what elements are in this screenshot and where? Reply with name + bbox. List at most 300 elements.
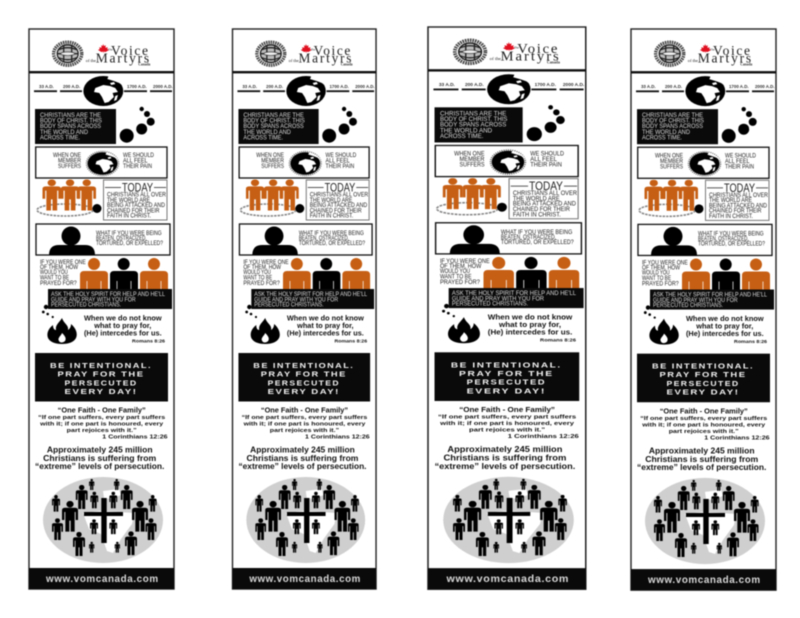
- three people: [682, 258, 770, 292]
- panel: today: CHAINED FOR THEIR: [310, 207, 362, 214]
- panel: today: FAITH IN CHRIST.: [310, 212, 353, 220]
- card frame: [631, 29, 776, 590]
- black text panel: ACROSS TIME.: [40, 134, 80, 142]
- timeline: 2000 A.D.: [153, 84, 173, 89]
- panel: when one member suffers: [638, 147, 769, 178]
- timeline: 200 A.D.: [465, 82, 484, 87]
- text: one faith one family: “If one part suffers, every part suffers: [38, 415, 165, 421]
- small dots: [442, 304, 455, 317]
- panel: today: THE WORLD ARE: [513, 195, 560, 202]
- black text panel: THE WORLD AND: [642, 129, 690, 136]
- black text panel: ACROSS TIME.: [243, 134, 283, 142]
- text: if you were one of them: WOULD YOU: [440, 267, 470, 275]
- text: one faith one family: “One Faith - One Family”: [459, 405, 555, 414]
- black panel: be intentional: BE INTENTIONAL.: [50, 361, 152, 370]
- black text panel: [637, 109, 718, 144]
- panel: today: CHRISTIANS ALL OVER: [513, 189, 577, 197]
- black text panel: BODY SPANS ACROSS: [642, 123, 703, 130]
- panel: when one member suffers: [435, 145, 578, 177]
- header divider: [428, 69, 586, 72]
- black panel: be intentional: [35, 353, 168, 402]
- card frame: [29, 29, 174, 589]
- panel: today: TODAY: [529, 180, 563, 193]
- text: one faith one family: “One Faith - One Family”: [58, 406, 146, 414]
- text: romans verse: what to pray for,: [93, 321, 151, 330]
- black text panel: CHRISTIANS ARE THE: [440, 110, 507, 117]
- logo header: Martyrs: [299, 50, 351, 66]
- text: romans verse: When we do not know: [84, 314, 162, 322]
- black panel: be intentional: PERSECUTED: [268, 378, 340, 387]
- text: if you were one of them: PRAYED FOR?: [440, 278, 480, 286]
- text: if you were one of them: WANT TO BE: [642, 275, 671, 282]
- panel: today: [104, 180, 167, 220]
- panel: when one member suffers: MEMBER: [460, 155, 485, 163]
- black text panel: BODY OF CHRIST. THIS: [642, 118, 704, 125]
- panel: today: [706, 180, 769, 220]
- timeline: 2000 A.D.: [755, 84, 775, 89]
- text: one faith one family: 1 Corinthians 12:26: [704, 435, 770, 441]
- black panel: be intentional: BE INTENTIONAL.: [253, 361, 354, 370]
- text: 245 million: [238, 444, 366, 471]
- logo header: of the: [86, 58, 96, 63]
- icon: flame: [251, 318, 280, 344]
- panel: today: TODAY: [122, 182, 153, 194]
- text: if you were one of them: WOULD YOU: [243, 269, 271, 276]
- text: 245 million: Approximately 245 million: [250, 444, 355, 455]
- logo header: Canada: [547, 61, 560, 65]
- text: romans verse: (He) intercedes for us.: [488, 328, 572, 337]
- text: if you were one of them: [642, 259, 688, 288]
- text: romans verse: Romans 8:26: [334, 338, 368, 344]
- small dots: [245, 305, 257, 318]
- panel: what if: WHAT IF YOU WERE BEING: [96, 230, 162, 237]
- globe with crowd and cross: [645, 478, 765, 564]
- thought dots: [322, 107, 357, 143]
- black text panel: BODY SPANS ACROSS: [243, 123, 304, 130]
- text: one faith one family: 1 Corinthians 12:26: [508, 434, 580, 440]
- text: 245 million: “extreme” levels of persecution.: [35, 461, 164, 471]
- globe with crowd and cross: [443, 477, 574, 563]
- timeline: 200 A.D.: [665, 84, 682, 89]
- text: one faith one family: part rejoices with it.”: [469, 428, 545, 434]
- panel: what if: TORTURED, OR EXPELLED?: [698, 240, 765, 247]
- black text panel: ACROSS TIME.: [440, 132, 484, 140]
- text: romans verse: [488, 313, 576, 344]
- text: one faith one family: part rejoices with it.”: [67, 428, 137, 434]
- timeline: 33 A.D.: [641, 84, 656, 89]
- black band: ask the holy spirit: GUIDE AND PRAY WITH YOU FOR: [51, 296, 136, 303]
- text: one faith one family: “If one part suffers, every part suffers: [640, 416, 767, 422]
- panel: today: TODAY: [325, 182, 356, 195]
- logo header: of the: [289, 58, 299, 63]
- timeline: 33 A.D.: [242, 84, 257, 89]
- panel: today: BEING ATTACKED AND: [310, 202, 367, 209]
- black band: ask the holy spirit: ASK THE HOLY SPIRIT FOR HELP AND HE'LL: [51, 291, 165, 298]
- black text panel: BODY OF CHRIST. THIS: [40, 118, 102, 124]
- black panel: be intentional: PRAY FOR THE: [58, 370, 144, 378]
- text: romans verse: When we do not know: [686, 314, 764, 323]
- black panel: be intentional: [637, 354, 770, 402]
- black band: ask the holy spirit: GUIDE AND PRAY WITH YOU FOR: [254, 296, 338, 303]
- text: romans verse: what to pray for,: [296, 321, 354, 330]
- black band: ask the holy spirit: [449, 288, 584, 308]
- black band: ask the holy spirit: [48, 289, 172, 309]
- logo header: [455, 40, 560, 65]
- black text panel: [238, 109, 319, 144]
- logo header: Canada: [740, 63, 752, 67]
- text: if you were one of them: OF THEM, HOW: [642, 264, 680, 271]
- panel: today: BEING ATTACKED AND: [709, 202, 767, 209]
- text: one faith one family: part rejoices with it.”: [669, 429, 739, 435]
- icon: flame: [47, 318, 77, 344]
- black text panel: [35, 109, 116, 144]
- logo header: [257, 42, 353, 67]
- text: if you were one of them: OF THEM, HOW: [40, 264, 78, 271]
- panel: today: CHRISTIANS ALL OVER: [310, 191, 368, 199]
- icon: flame: [448, 317, 480, 343]
- text: romans verse: Romans 8:26: [540, 338, 576, 344]
- footer url bar: [232, 568, 376, 589]
- panel: when one member suffers: ALL FEEL: [326, 157, 350, 165]
- panel: when one member suffers: ALL FEEL: [725, 158, 750, 165]
- text: romans verse: [287, 313, 368, 344]
- black band: ask the holy spirit: PERSECUTED CHRISTIANS.: [452, 300, 528, 308]
- panel: what if: TORTURED, OR EXPELLED?: [501, 238, 574, 246]
- black panel: be intentional: BE INTENTIONAL.: [652, 362, 754, 371]
- panel: when one member suffers: WE SHOULD: [123, 152, 154, 159]
- logo header: [656, 42, 752, 67]
- timeline: 1700 A.D.: [330, 84, 349, 89]
- logo header: Voice: [111, 43, 148, 58]
- text: one faith one family: “One Faith - One Family”: [261, 405, 348, 415]
- black text panel: THE WORLD AND: [243, 129, 291, 136]
- panel: what if: [638, 224, 772, 255]
- panel: what if: [239, 224, 372, 255]
- text: if you were one of them: PRAYED FOR?: [40, 280, 77, 287]
- logo header: Martyrs: [698, 51, 751, 66]
- text: if you were one of them: [440, 257, 490, 286]
- panel: today: CHAINED FOR THEIR: [107, 207, 160, 214]
- logo header: Martyrs: [501, 49, 559, 64]
- panel: when one member suffers: THEIR PAIN: [530, 161, 562, 168]
- panel: today: [509, 179, 578, 219]
- text: 245 million: Christians is suffering from: [247, 453, 359, 463]
- panel: today: THE WORLD ARE: [709, 197, 752, 204]
- logo header: Canada: [341, 62, 353, 67]
- footer url bar: www.vomcanada.com: [248, 574, 361, 585]
- footer url bar: www.vomcanada.com: [445, 575, 569, 585]
- panel: when one member suffers: WHEN ONE: [256, 152, 284, 159]
- black text panel: BODY SPANS ACROSS: [40, 123, 101, 130]
- header divider: [631, 71, 776, 73]
- panel: today: BEING ATTACKED AND: [513, 200, 576, 208]
- text: one faith one family: with it; if one part is honoured, every: [242, 421, 366, 428]
- timeline: 1700 A.D.: [729, 84, 749, 89]
- panel: when one member suffers: THEIR PAIN: [123, 163, 152, 170]
- black panel: be intentional: EVERY DAY!: [666, 388, 739, 397]
- panel: what if: TORTURED, OR EXPELLED?: [299, 240, 365, 247]
- text: 245 million: [35, 444, 164, 471]
- black text panel: CHRISTIANS ARE THE: [40, 112, 101, 119]
- footer url bar: www.vomcanada.com: [45, 574, 159, 585]
- black panel: be intentional: EVERY DAY!: [64, 387, 138, 396]
- text: one faith one family: with it; if one part is honoured, every: [39, 422, 164, 428]
- three people: [80, 258, 168, 291]
- panel: when one member suffers: MEMBER: [58, 158, 81, 164]
- panel: when one member suffers: WHEN ONE: [655, 152, 683, 159]
- black text panel: BODY OF CHRIST. THIS: [243, 117, 305, 125]
- footer url bar: [428, 568, 586, 589]
- black text panel: THE WORLD AND: [440, 127, 492, 134]
- panel: today: FAITH IN CHRIST.: [107, 212, 151, 220]
- panel: today: CHRISTIANS ALL OVER: [709, 192, 768, 199]
- text: romans verse: (He) intercedes for us.: [84, 328, 162, 338]
- thought dots: [527, 105, 565, 141]
- text: if you were one of them: WOULD YOU: [40, 269, 68, 276]
- timeline: 1700 A.D.: [127, 84, 147, 89]
- text: romans verse: [84, 314, 165, 344]
- panel: today: [306, 180, 369, 220]
- panel: what if: TORTURED, OR EXPELLED?: [96, 240, 163, 247]
- timeline: 1700 A.D.: [535, 82, 556, 87]
- logo header: Martyrs: [96, 50, 149, 66]
- black text panel: CHRISTIANS ARE THE: [243, 112, 304, 119]
- text: 245 million: Christians is suffering from: [43, 453, 157, 463]
- small dots: [644, 305, 656, 319]
- text: romans verse: [686, 314, 767, 344]
- panel: what if: [36, 224, 170, 255]
- text: one faith one family: with it; if one part is honoured, every: [439, 421, 575, 427]
- text: romans verse: Romans 8:26: [734, 339, 767, 344]
- thought dots: [120, 107, 155, 143]
- panel: when one member suffers: WE SHOULD: [530, 150, 564, 157]
- panel: what if: [436, 223, 581, 254]
- panel: what if: WHAT IF YOU WERE BEING: [698, 230, 764, 237]
- panel: today: CHRISTIANS ALL OVER: [107, 192, 166, 198]
- bookmark card 3: [428, 27, 586, 589]
- logo header: [54, 42, 150, 66]
- panel: when one member suffers: WE SHOULD: [326, 152, 356, 159]
- black panel: be intentional: EVERY DAY!: [268, 387, 340, 396]
- header divider: [29, 71, 174, 73]
- card frame: [232, 29, 376, 589]
- panel: when one member suffers: WHEN ONE: [454, 150, 485, 157]
- black panel: be intentional: PERSECUTED: [467, 378, 546, 387]
- panel: today: THE WORLD ARE: [107, 197, 150, 204]
- text: one faith one family: [242, 405, 370, 441]
- logo header: Canada: [138, 62, 150, 66]
- chained orange figures: [37, 179, 102, 216]
- black text panel: BODY SPANS ACROSS: [440, 121, 507, 128]
- text: if you were one of them: [243, 259, 289, 287]
- text: if you were one of them: WANT TO BE: [40, 274, 69, 282]
- panel: today: CHAINED FOR THEIR: [513, 205, 570, 213]
- text: one faith one family: “One Faith - One Family”: [660, 406, 748, 415]
- black panel: be intentional: PRAY FOR THE: [659, 370, 746, 379]
- panel: when one member suffers: ALL FEEL: [530, 155, 557, 163]
- black text panel: THE WORLD AND: [40, 129, 88, 136]
- timeline: [237, 76, 375, 106]
- panel: when one member suffers: WHEN ONE: [53, 152, 81, 159]
- logo header: The: [311, 47, 316, 52]
- black band: ask the holy spirit: GUIDE AND PRAY WITH YOU FOR: [452, 295, 544, 302]
- panel: what if: WHAT IF YOU WERE BEING: [501, 228, 572, 236]
- text: one faith one family: “If one part suffers, every part suffers: [438, 415, 577, 420]
- text: 245 million: Approximately 245 million: [649, 445, 755, 455]
- black text panel: CHRISTIANS ARE THE: [642, 112, 703, 119]
- panel: when one member suffers: [36, 147, 167, 178]
- bookmark card 4: [631, 29, 776, 590]
- panel: today: FAITH IN CHRIST.: [513, 210, 561, 218]
- black text panel: [435, 107, 523, 142]
- panel: when one member suffers: MEMBER: [660, 158, 683, 165]
- text: one faith one family: [38, 406, 168, 440]
- text: if you were one of them: IF YOU WERE ONE: [642, 259, 688, 266]
- timeline: 33 A.D.: [39, 84, 54, 89]
- text: 245 million: Christians is suffering from: [645, 454, 759, 464]
- panel: when one member suffers: SUFFERS: [261, 163, 284, 170]
- timeline: 2000 A.D.: [563, 82, 584, 87]
- timeline: 200 A.D.: [63, 84, 80, 89]
- panel: when one member suffers: SUFFERS: [58, 163, 81, 170]
- black panel: be intentional: BE INTENTIONAL.: [451, 361, 562, 369]
- text: 245 million: “extreme” levels of persecution.: [435, 461, 575, 471]
- logo header: The: [108, 48, 113, 52]
- text: romans verse: (He) intercedes for us.: [686, 329, 764, 338]
- small dots: [42, 305, 54, 318]
- text: romans verse: Romans 8:26: [132, 338, 165, 344]
- panel: when one member suffers: SUFFERS: [660, 163, 683, 170]
- logo header: Voice: [517, 42, 557, 57]
- text: romans verse: what to pray for,: [498, 320, 561, 329]
- bookmark card 2: [232, 29, 376, 589]
- chained orange figures: [437, 178, 507, 215]
- text: romans verse: what to pray for,: [695, 322, 753, 331]
- panel: when one member suffers: THEIR PAIN: [725, 163, 754, 170]
- header divider: [232, 71, 376, 73]
- text: if you were one of them: [40, 259, 86, 287]
- black panel: be intentional: PERSECUTED: [64, 378, 138, 387]
- panel: what if: WHAT IF YOU WERE BEING: [299, 230, 364, 237]
- black band: ask the holy spirit: [650, 290, 774, 310]
- black band: ask the holy spirit: PERSECUTED CHRISTIANS.: [51, 302, 121, 308]
- logo header: Voice: [314, 43, 350, 58]
- panel: what if: BEATEN, OSTRACIZED,: [501, 233, 556, 241]
- logo header: of the: [490, 57, 501, 62]
- panel: when one member suffers: THEIR PAIN: [326, 163, 354, 170]
- black panel: be intentional: PRAY FOR THE: [459, 369, 554, 378]
- text: 245 million: Approximately 245 million: [47, 444, 153, 454]
- text: romans verse: (He) intercedes for us.: [287, 328, 364, 338]
- text: 245 million: Approximately 245 million: [447, 445, 562, 454]
- text: if you were one of them: IF YOU WERE ONE: [243, 259, 289, 266]
- panel: what if: BEATEN, OSTRACIZED,: [698, 235, 749, 242]
- black text panel: ACROSS TIME.: [642, 135, 682, 142]
- globe with crowd and cross: [43, 477, 163, 563]
- logo header: Voice: [713, 43, 750, 58]
- black band: ask the holy spirit: ASK THE HOLY SPIRIT FOR HELP AND HE'LL: [452, 289, 576, 297]
- black band: ask the holy spirit: ASK THE HOLY SPIRIT FOR HELP AND HE'LL: [254, 291, 367, 298]
- black panel: be intentional: PRAY FOR THE: [261, 369, 347, 379]
- black band: ask the holy spirit: PERSECUTED CHRISTIANS.: [653, 302, 723, 309]
- logo header: of the: [688, 58, 698, 63]
- text: if you were one of them: WANT TO BE: [243, 274, 272, 282]
- logo header: The: [514, 46, 520, 50]
- text: one faith one family: 1 Corinthians 12:26: [102, 434, 168, 440]
- text: if you were one of them: OF THEM, HOW: [440, 262, 482, 270]
- text: if you were one of them: IF YOU WERE ONE: [440, 257, 490, 265]
- bookmark card 1: [29, 29, 174, 589]
- thought dots: [722, 107, 757, 143]
- footer url bar: [631, 569, 776, 590]
- black band: ask the holy spirit: [251, 289, 374, 309]
- timeline: [636, 76, 775, 106]
- panel: today: BEING ATTACKED AND: [107, 202, 165, 209]
- footer url bar: www.vomcanada.com: [647, 575, 761, 586]
- card frame: [428, 27, 586, 589]
- text: one faith one family: with it; if one part is honoured, every: [641, 422, 766, 428]
- black band: ask the holy spirit: GUIDE AND PRAY WITH YOU FOR: [653, 297, 738, 304]
- black panel: be intentional: PERSECUTED: [666, 379, 739, 388]
- text: one faith one family: 1 Corinthians 12:26: [305, 434, 370, 441]
- text: 245 million: [637, 445, 766, 472]
- text: 245 million: “extreme” levels of persecution.: [238, 461, 366, 471]
- text: one faith one family: part rejoices with it.”: [270, 428, 339, 434]
- text: if you were one of them: PRAYED FOR?: [642, 281, 679, 288]
- text: if you were one of them: WOULD YOU: [642, 269, 670, 276]
- logo header: The: [710, 48, 715, 52]
- panel: what if: BEATEN, OSTRACIZED,: [299, 235, 349, 242]
- black panel: be intentional: EVERY DAY!: [467, 387, 546, 395]
- three people: [483, 257, 579, 290]
- text: 245 million: Christians is suffering from: [443, 453, 566, 463]
- text: one faith one family: “If one part suffers, every part suffers: [242, 415, 367, 421]
- text: 245 million: [435, 445, 575, 471]
- panel: what if: BEATEN, OSTRACIZED,: [96, 235, 147, 242]
- globe with crowd and cross: [246, 477, 365, 563]
- panel: when one member suffers: MEMBER: [261, 157, 284, 165]
- timeline: 2000 A.D.: [355, 84, 375, 89]
- black text panel: BODY OF CHRIST. THIS: [440, 115, 508, 123]
- text: if you were one of them: WANT TO BE: [440, 273, 472, 280]
- panel: today: THE WORLD ARE: [310, 197, 353, 204]
- text: if you were one of them: PRAYED FOR?: [243, 280, 280, 287]
- three people: [283, 258, 370, 291]
- text: if you were one of them: IF YOU WERE ONE: [40, 259, 86, 266]
- panel: today: FAITH IN CHRIST.: [709, 213, 753, 220]
- panel: when one member suffers: ALL FEEL: [123, 158, 148, 164]
- black panel: be intentional: [435, 352, 579, 401]
- panel: when one member suffers: [239, 147, 369, 178]
- black band: ask the holy spirit: PERSECUTED CHRISTIANS.: [254, 301, 324, 309]
- text: one faith one family: [438, 405, 580, 440]
- panel: when one member suffers: SUFFERS: [460, 161, 485, 168]
- panel: when one member suffers: WE SHOULD: [725, 152, 756, 159]
- text: 245 million: “extreme” levels of persecution.: [637, 462, 766, 472]
- chained orange figures: [639, 180, 704, 216]
- footer url bar: [29, 568, 174, 589]
- black panel: be intentional: [238, 353, 370, 402]
- panel: today: CHAINED FOR THEIR: [709, 208, 762, 215]
- black band: ask the holy spirit: ASK THE HOLY SPIRIT FOR HELP AND HE'LL: [653, 292, 767, 299]
- timeline: 33 A.D.: [439, 82, 455, 87]
- timeline: [34, 76, 173, 106]
- chained orange figures: [240, 179, 304, 216]
- text: romans verse: When we do not know: [488, 313, 573, 322]
- timeline: [433, 74, 584, 104]
- text: one faith one family: [640, 406, 770, 441]
- panel: today: TODAY: [724, 183, 755, 195]
